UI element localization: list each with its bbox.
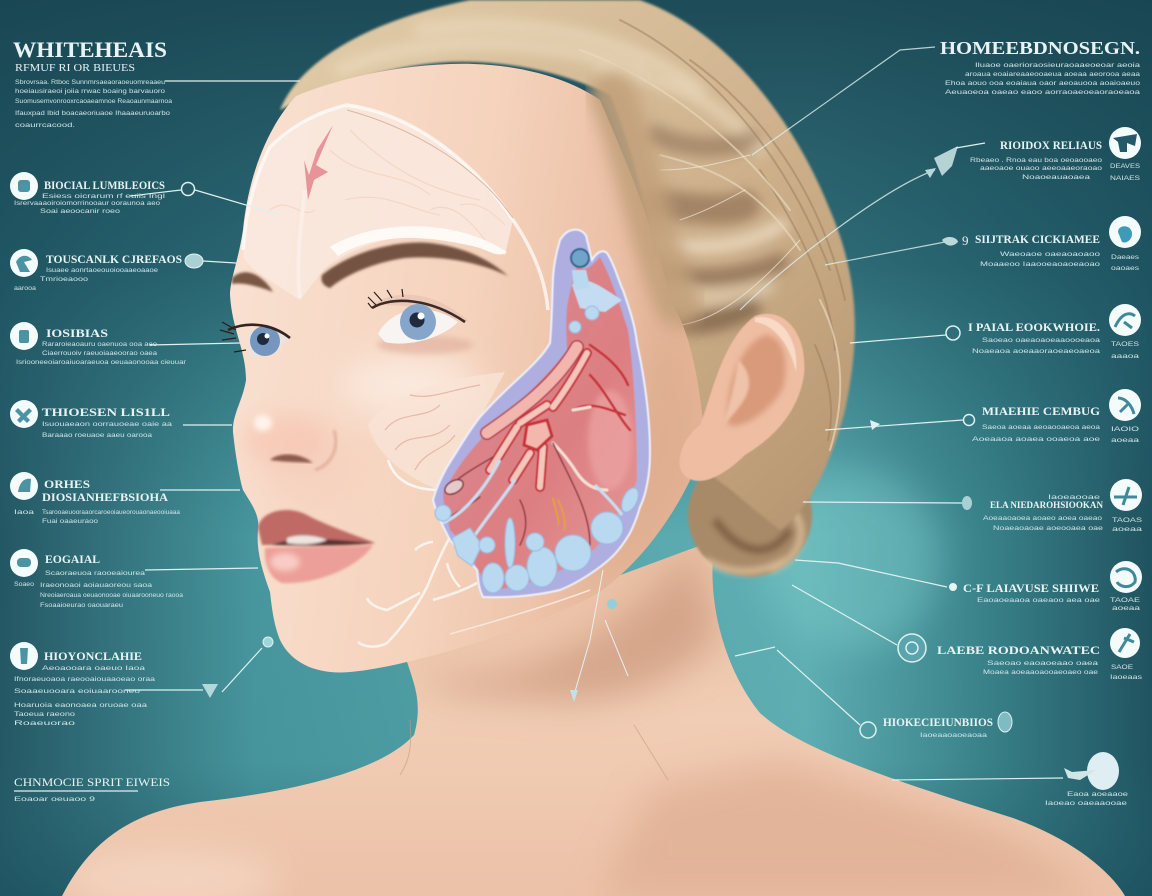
title block: WHITEHEAIS	[13, 37, 167, 62]
item: right 4: IAOIO	[1111, 426, 1139, 433]
title block: RFMUF RI OR BIEUES	[15, 63, 135, 74]
item: right 5: Noaeaoaoae aoeooaea oae	[993, 525, 1104, 532]
item: left 7: Soaaeuooara eoiuaarooneo	[14, 688, 141, 695]
item: right 6	[795, 560, 1142, 612]
item: right 6: TAOAE	[1110, 597, 1141, 604]
item: right 4: Aoeaaoa aoaea ooaeoa aoe	[972, 436, 1101, 443]
item: left bottom: CHNMOCIE SPRIT EIWEIS	[14, 775, 170, 789]
item: right 2: SIIJTRAK CICKIAMEE	[975, 232, 1100, 246]
forehead overlay	[243, 105, 548, 310]
right header block: Aeuaoeoa oaeao eaoo aorraoaeoeaoraoeaoa	[945, 89, 1141, 96]
icon: hat	[1064, 752, 1119, 790]
item: right bottom with hat icon: Eaoa aoeaaoe	[1067, 791, 1129, 798]
cheek overlay	[368, 372, 505, 490]
cheek anatomy cross-section	[433, 230, 650, 597]
item: left 1: Esiess oicrarum rf euiis Ingl	[42, 193, 166, 200]
item: left 3: IOSIBIAS	[46, 326, 108, 340]
item: left 7: Ifnoraeuoaoa raeooaiouaaoeao oraa	[14, 676, 155, 683]
item: left 3: Ciaerrouoiv raeuoiaaeoorao oaea	[42, 350, 157, 357]
item: left 5: Tsarooaeuooraaorcaroeoiaueorouaonaeooiuaaa	[42, 509, 180, 516]
item: left 2: TOUSCANLK CJREFAOS	[46, 252, 182, 266]
icon	[1109, 389, 1141, 421]
icon	[10, 549, 38, 577]
item: right 3: Saoeao oaeaoaoeaaoooeaoa	[982, 337, 1101, 344]
icon	[1110, 561, 1142, 593]
right highlight	[588, 390, 632, 490]
item: left 6: Soaeo	[14, 581, 34, 588]
item: left 3: Isriooneeoiaroaiuoaraeuoa oeuaaonooaa cieuuar	[16, 359, 187, 366]
item: left 5: ORHES	[44, 477, 90, 491]
item: right 7	[792, 585, 1143, 681]
item: right 1: Rbeaeo . Rnoa eau boa oeoaooaeo	[970, 157, 1102, 164]
neck and shoulders	[62, 540, 1125, 896]
item: left 7: Roaeuorao	[14, 720, 76, 727]
item: right 8	[735, 647, 1012, 739]
item: right 1: NAIAES	[1110, 175, 1141, 182]
item: right 4: aoeaa	[1111, 437, 1140, 444]
face shading	[285, 350, 688, 570]
vessels	[446, 345, 630, 545]
right header block: Ehoa aouo ooa eoaiaua oaor aeoauooa aoaioaeuo	[945, 80, 1141, 87]
icon	[10, 172, 38, 200]
tissue	[443, 257, 637, 590]
item: right bottom with hat icon	[892, 752, 1129, 807]
item: left 6	[10, 549, 258, 609]
item: left 3	[10, 322, 240, 366]
nose	[243, 414, 336, 470]
item: left 7: Hoaruoia eaonoaea oruoae oaa	[14, 702, 148, 709]
item: left 6: Fsoaaioeurao oaouaraeu	[40, 602, 123, 609]
item: left 2	[10, 249, 236, 292]
item: right 5: aoeaa	[1112, 526, 1143, 533]
item: right 4: MIAEHIE CEMBUG	[982, 404, 1100, 418]
item: right 3	[850, 304, 1141, 360]
item: right bottom with hat icon: Iaoeao oaeaaooae	[1045, 800, 1128, 807]
hair	[280, 0, 855, 530]
icon	[10, 400, 38, 428]
item: left 4: Baraaao roeuaoe aaeu oarooa	[42, 432, 152, 439]
item: right 7: SAOE	[1111, 664, 1134, 671]
item: left 2: Isuaee aonrtaoeouoiooaaeoaaoe	[46, 267, 158, 274]
item: right 3: Noaeaoa aoeaaoraoeaeoaeoa	[972, 348, 1101, 355]
item: left 7	[10, 637, 273, 727]
eyebrows	[232, 243, 508, 292]
lips	[258, 510, 375, 583]
item: left 3: Rararoieaoauru oaenuoa ooa aeo	[42, 341, 157, 348]
item: right 5: TAOAS	[1112, 517, 1143, 524]
item: right 6: C-F LAIAVUSE SHIIWE	[963, 581, 1099, 595]
item: right 7: LAEBE RODOANWATEC	[937, 643, 1100, 657]
item: right 1: RIOIDOX RELIAUS	[1000, 138, 1102, 152]
item: left 7: HIOYONCLAHIE	[44, 649, 142, 663]
icon	[10, 249, 38, 277]
title block: Ifauxpad Ibid boacaeoriuaoe Ihaaaeuruoarbo	[15, 110, 170, 117]
item: right 6: Eaoaoeaaoa oaeaoo aea oae	[977, 597, 1101, 604]
item: left 4	[10, 400, 232, 439]
item: left 5	[10, 472, 240, 525]
item: left 1: Isrervaaaoiroiomorrinooaur ooraunoa aeo	[14, 200, 160, 207]
hair strands	[340, 20, 845, 450]
item: left 6: Scaoraeuoa raooeaiourea	[45, 570, 146, 577]
item: left bottom	[14, 775, 170, 803]
item: left 5: Fuai oaaeuraoo	[42, 518, 98, 525]
title block: coaurrcacood.	[15, 122, 75, 129]
grey cell	[442, 477, 466, 497]
item: left 6: Iraeonoaoi aoiauaoreou saoa	[40, 582, 152, 589]
item: left bottom: Eoaoar oeuaoo 9	[14, 796, 96, 803]
right header block: HOMEEBDNOSEGN.	[940, 38, 1140, 58]
right header block	[940, 38, 1141, 96]
icon	[10, 472, 38, 500]
neck shadow	[60, 550, 1100, 896]
item: right 7: Moaea aoeaaoaooaeoaeo oae	[983, 669, 1098, 676]
title block: hoeiausiraeoi joiia rrwac boaing barvauoro	[15, 88, 165, 95]
item: left 5: Iaoa	[14, 509, 35, 516]
item: left 6: Nreoiaeroaua oeuaonooae oiuaarooneuo raooa	[40, 592, 183, 599]
icon	[1110, 628, 1140, 658]
neck crease	[400, 720, 668, 780]
item: left 1: BIOCIAL LUMBLEOICS	[44, 178, 165, 192]
icon	[1110, 479, 1142, 511]
item: right 2: 9	[962, 233, 968, 248]
right header block: aroaua eoaiareaaeooaeua aoeaa aeorooa aeaa	[965, 71, 1140, 78]
blue strands	[443, 460, 622, 545]
item: right 1	[925, 127, 1141, 182]
item: left 7: Aeoaooara oaeuo Iaoa	[42, 665, 146, 672]
item: right 2: Waeoaoe oaeaoaoaoo	[1000, 251, 1101, 258]
right eye	[368, 289, 473, 354]
item: right 3: aaaoa	[1111, 353, 1140, 360]
icon	[10, 642, 38, 670]
temple hair blend	[612, 95, 678, 305]
neck callouts	[570, 570, 628, 702]
item: left 1	[10, 172, 280, 215]
ear	[679, 314, 804, 481]
item: right 2: oaoaes	[1111, 265, 1140, 272]
leader lines over hair	[740, 47, 945, 310]
jaw strands	[358, 537, 477, 647]
item: right 1: Noaoeauaoaea	[1022, 174, 1091, 181]
item: right 8: Iaoeaaoaoeaoaa	[920, 732, 988, 739]
icon	[1109, 304, 1141, 336]
item: right 7: Saeoao eaoaoeaao oaea	[987, 660, 1099, 667]
item: right 2: Moaaeoo Iaaooeaoaoeaoao	[980, 261, 1101, 268]
left eye	[220, 322, 290, 357]
item: right 1: DEAVES	[1110, 163, 1141, 170]
item: right 8: HIOKECIEIUNBIIOS	[883, 715, 993, 729]
item: right 7: Iaoeaas	[1110, 674, 1143, 681]
item: right 2: Daeaes	[1111, 254, 1140, 261]
item: left 4: Isuouaeaon oorrauoeae oaie aa	[42, 421, 173, 428]
item: right 1: aaeoaoe ouaoo aeeoaaeoraoao	[980, 165, 1102, 172]
item: right 6: aoeaa	[1112, 605, 1141, 612]
item: right 3: TAOES	[1111, 341, 1140, 348]
item: left 1: Soai aeoocanir roeo	[40, 208, 121, 215]
item: left 6: EOGAIAL	[45, 552, 100, 566]
title block: Sbrovrsaa. Rtboc Sunnmrsaeaoraoeuomreaaeu	[15, 79, 165, 86]
icon	[1109, 216, 1141, 248]
item: right 3: I PAIAL EOOKWHOIE.	[968, 320, 1100, 334]
item: left 2: Tmrioeaooo	[40, 276, 89, 283]
title block	[13, 37, 300, 129]
item: left 7: Taoeua raeono	[14, 711, 76, 718]
item: right 4	[825, 389, 1141, 444]
item: right 4: Saeoa aoeaa aeoaooaeoa aeoa	[982, 424, 1100, 431]
icon	[10, 322, 38, 350]
outer membrane	[433, 230, 650, 597]
item: right 5: Iaoeaooae	[1048, 494, 1101, 501]
icon	[1109, 127, 1141, 159]
item: right 5: Aoeaaoaoea aoaeo aoea oaeao	[983, 515, 1102, 522]
item: right 5	[803, 479, 1143, 533]
item: left 4: THIOESEN LIS1LL	[42, 405, 170, 419]
face	[230, 64, 705, 673]
vessel junction	[524, 420, 552, 450]
item: left 2: aarooa	[14, 285, 36, 292]
item: left 5: DIOSIANHEFBSIOHA	[42, 490, 168, 504]
item: right 2	[942, 216, 1141, 272]
item: right 5: ELA NIEDAROHSIOOKAN	[990, 500, 1103, 510]
blue globules	[435, 249, 642, 593]
right header block: Iluaoe oaerioraosieuraoaaeoeoar aeoia	[975, 62, 1141, 69]
hair bun	[688, 440, 812, 577]
title block: Suomusemvonrooxrcaoaeamnoe Reaoaunmaarnoa	[15, 98, 172, 105]
